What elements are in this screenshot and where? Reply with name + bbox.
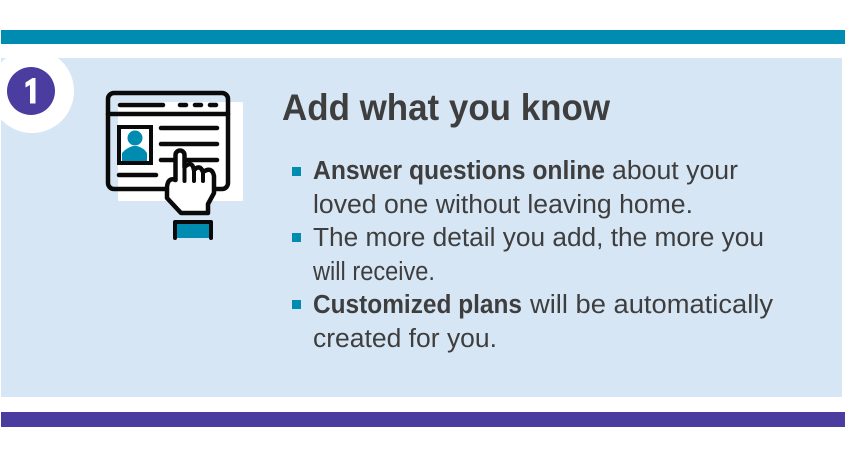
bullet 3 — [292, 291, 773, 353]
bullet 1: about your — [612, 157, 739, 185]
step number badge — [0, 49, 74, 133]
bullet 3: Customized plans — [313, 291, 522, 319]
bullet 1: Answer questions online — [313, 157, 605, 185]
bullet 1 — [292, 157, 739, 219]
icon: web form with pointing hand — [108, 93, 243, 238]
bullet 1: loved one without leaving home. — [313, 191, 693, 219]
title: Add what you know — [282, 87, 610, 128]
bullet 2: The more detail you add, the more you — [313, 224, 764, 252]
bullet 3: will be automatically — [529, 291, 773, 319]
bullet 2 — [292, 224, 764, 286]
top teal bar — [1, 30, 845, 44]
bullet 3: created for you. — [313, 325, 497, 353]
panel: light blue background — [1, 58, 842, 397]
bullet list — [292, 157, 773, 353]
bullet 2: will receive. — [312, 258, 435, 286]
bottom purple bar — [1, 412, 845, 427]
